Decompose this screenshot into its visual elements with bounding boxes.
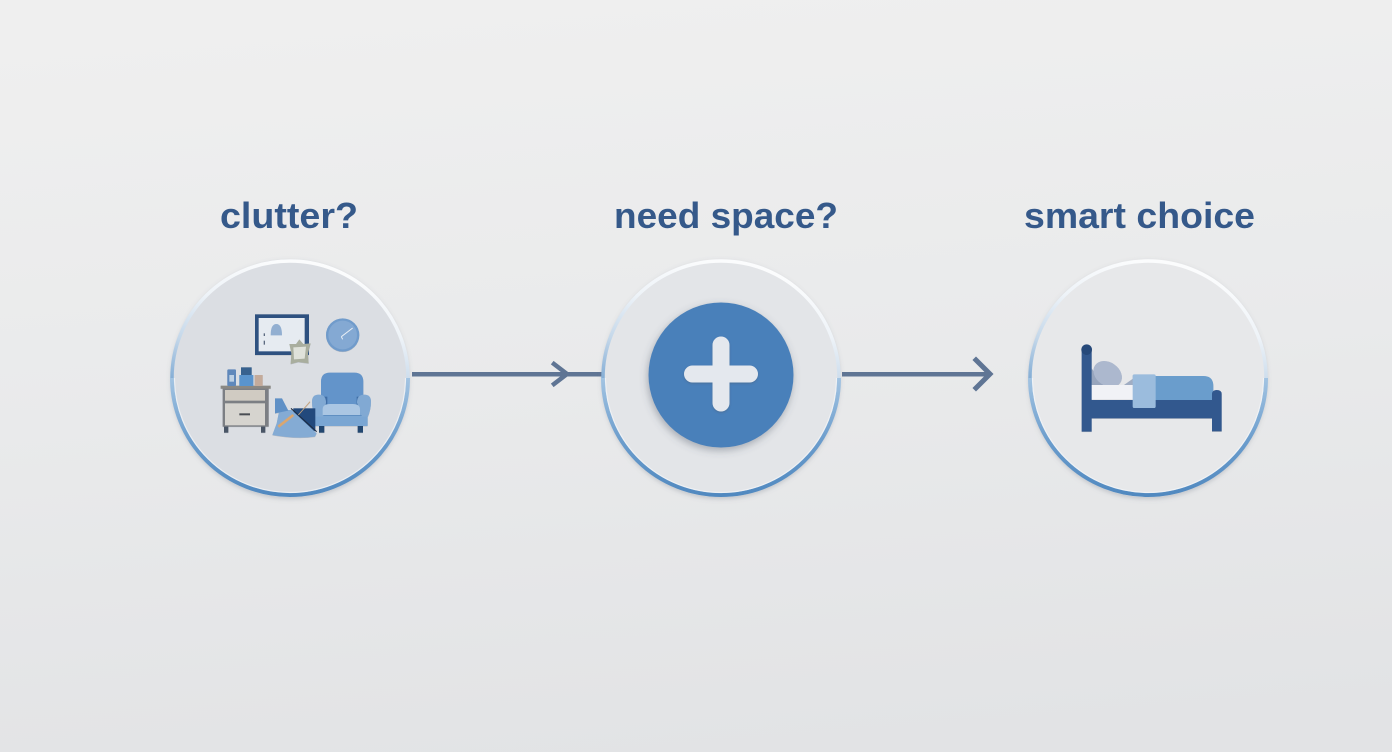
icon: inner pillow patch (293, 347, 306, 359)
heading: need space?: need space? (614, 195, 838, 236)
panel: clutter circle (171, 259, 409, 497)
icon: armchair (312, 373, 371, 433)
icon: mattress (1091, 385, 1134, 400)
icon: blanket (1133, 376, 1213, 401)
icon: bed (1081, 344, 1222, 432)
icon: messy pile (272, 398, 317, 438)
panel: smart choice circle (1029, 259, 1267, 497)
icon: pillow shadow (1092, 368, 1103, 385)
icon: plus sign (684, 336, 758, 412)
icon: pillow shadow right (1124, 378, 1133, 385)
icon: nightstand (221, 386, 271, 433)
panel: need space circle (602, 259, 840, 497)
arrow: clutter to need space (412, 364, 602, 384)
icon: items on nightstand (227, 367, 263, 386)
icon: cluttered room (221, 314, 371, 438)
icon: blue disc with plus (648, 302, 794, 448)
icon: picture frame (255, 314, 309, 355)
icon: headboard knob (1081, 344, 1092, 355)
icon: pillow (1088, 356, 1127, 392)
icon: bed frame (1082, 346, 1222, 432)
icon: blanket fold (1133, 374, 1156, 408)
icon: crumpled pillow (289, 339, 311, 364)
arrow: need space to smart choice (842, 360, 990, 388)
heading: smart choice: smart choice (1024, 195, 1255, 236)
heading: clutter?: clutter? (220, 195, 358, 236)
icon: wall clock (326, 318, 359, 352)
